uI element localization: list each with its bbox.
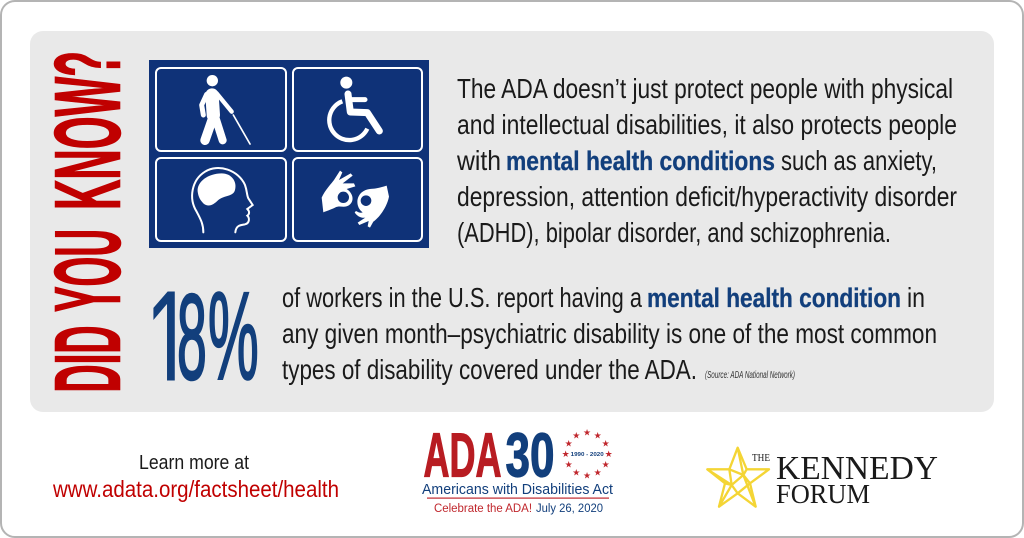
text block: ADA protections — [456, 73, 957, 248]
text block: workers statistic: mental health condition — [647, 283, 901, 313]
icon grid: disabilities — [149, 60, 429, 248]
icon: gold star — [707, 448, 769, 507]
stars ring: ★ — [602, 460, 610, 470]
stars ring: ★ — [565, 460, 573, 470]
stars ring: ★ — [594, 468, 602, 478]
logo: ADA 30: 1990 - 2020 — [571, 452, 604, 458]
text block: workers statistic — [282, 282, 937, 385]
stars ring: ★ — [583, 427, 591, 437]
statistic: 18 percent: % — [208, 269, 259, 406]
text block: ADA protections: such as anxiety, — [781, 145, 937, 176]
text block: workers statistic: of workers in the U.S. report having a — [282, 282, 642, 313]
stars ring: ★ — [565, 438, 573, 448]
statistic: 18 percent — [153, 291, 258, 382]
statistic: 18 percent: 8 — [177, 269, 207, 405]
stars ring: ★ — [602, 438, 610, 448]
icon: wheelchair — [329, 77, 379, 140]
stars ring: ★ — [562, 449, 570, 459]
text block: ADA protections: with — [456, 145, 501, 176]
stars ring: ★ — [605, 449, 613, 459]
text block: workers statistic: in — [907, 282, 925, 313]
learn more link: Learn more at — [139, 452, 249, 474]
stars ring: ★ — [572, 468, 580, 478]
logo: ADA 30: 30 — [506, 422, 554, 490]
logo: ADA 30 — [422, 422, 613, 515]
icon: sign language hands — [322, 171, 389, 228]
panel: did you know — [30, 31, 994, 424]
stars ring: ★ — [594, 430, 602, 440]
stars ring: ★ — [572, 430, 580, 440]
logo: Kennedy Forum: FORUM — [776, 479, 870, 509]
logo: ADA 30: ADA — [424, 422, 502, 490]
logo: ADA 30: July 26, 2020 — [536, 503, 603, 515]
text block: ADA protections: (ADHD), bipolar disorder, and schizophrenia. — [457, 217, 891, 248]
logo: Kennedy Forum: THE — [752, 452, 770, 464]
text block: workers statistic: types of disability covered under the ADA. — [282, 354, 697, 385]
learn more link: www.adata.org/factsheet/health — [52, 476, 339, 502]
heading: did you know: YOU — [36, 229, 140, 312]
logo: ADA 30: Americans with Disabilities Act — [422, 482, 613, 498]
stars ring: ★ — [583, 470, 591, 480]
source note: (Source: ADA National Network) — [705, 370, 795, 381]
icon: person with cane — [202, 75, 250, 144]
heading: did you know — [36, 51, 140, 392]
statistic: 18 percent: 1 — [145, 260, 194, 424]
text block: ADA protections: mental health conditions — [506, 146, 775, 176]
stars ring — [562, 427, 613, 480]
logo: ADA 30: Celebrate the ADA! — [434, 503, 532, 515]
icon: head with brain — [192, 168, 253, 232]
heading: did you know: DID — [36, 326, 140, 392]
learn more link — [52, 452, 339, 502]
logo: Kennedy Forum: KENNEDY — [776, 450, 938, 487]
logo: Kennedy Forum — [707, 448, 938, 509]
